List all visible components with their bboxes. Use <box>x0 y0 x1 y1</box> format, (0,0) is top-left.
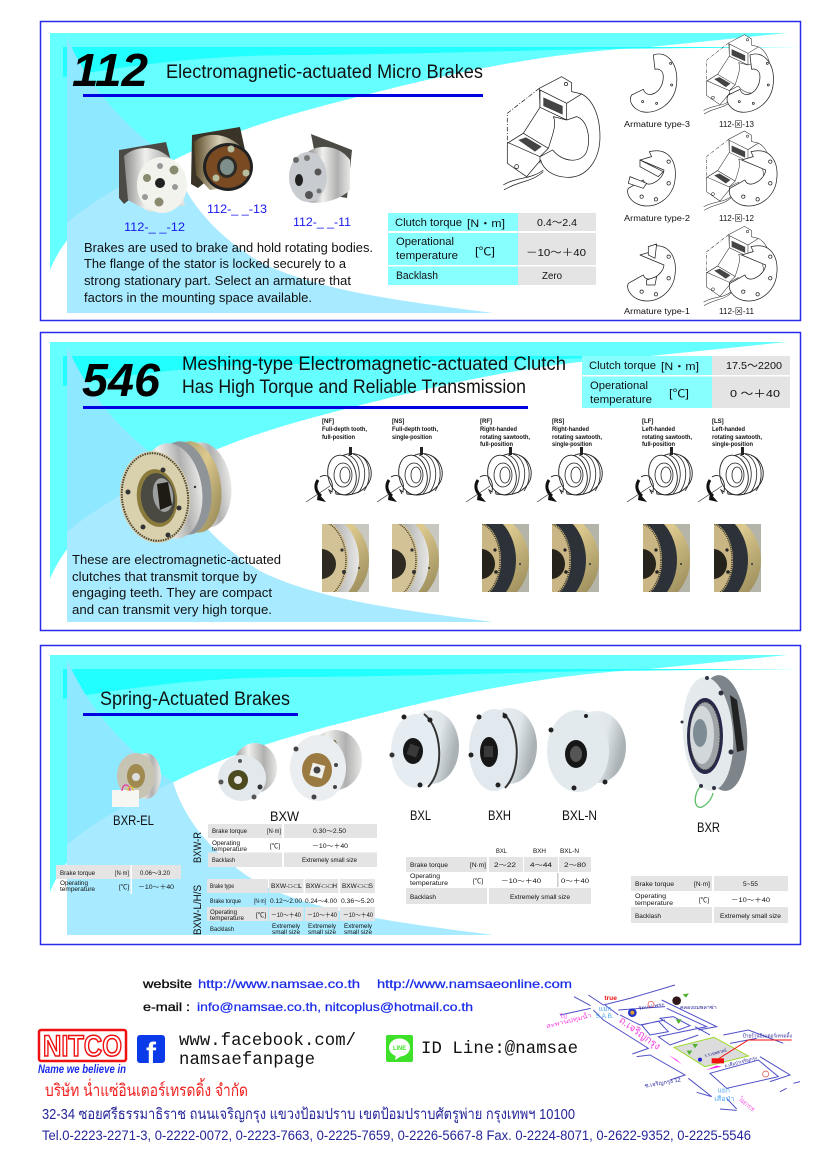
table: BXW-L/H/S specifications: small size <box>272 929 300 936</box>
map: location: ซ.เจริญกรุง 12 <box>644 1076 681 1090</box>
map: location: ไป <box>559 1012 567 1020</box>
text: address: 32-34 ซอยศรีธรรมาธิราช ถนนเจริญกรุง แขวงป้อมปราบ เขตป้อมปราบศัตรูพ่าย กรุงเทพฯ 10100 <box>42 1106 575 1124</box>
table: BXW-R specifications: Operating <box>212 840 240 847</box>
footer: website and email: e-mail : <box>143 1000 190 1014</box>
table: BXL BXH BXL-N specifications: 2～80 <box>564 862 586 869</box>
table: 112 specifications: －10～＋40 <box>526 248 586 259</box>
column: RS <box>495 419 604 610</box>
text: Facebook page <box>179 1032 356 1070</box>
label: 112-11 assembly: 112-⊠-11 <box>719 307 755 316</box>
heading: clutch title <box>83 354 566 409</box>
label: BXW: BXW <box>270 808 300 824</box>
table: BXR specifications: temperature <box>635 900 673 907</box>
table: 112 specifications: [℃] <box>475 246 495 258</box>
photo: BXH <box>468 708 537 791</box>
map: location: แยก <box>599 1006 611 1013</box>
photo: meshing clutch <box>114 438 237 547</box>
column: LF: full-position <box>642 442 675 448</box>
label: armature type-1: Armature type-1 <box>624 307 691 316</box>
photo: 112-11 brake <box>289 134 352 203</box>
table: BXW-R specifications: [℃] <box>270 842 280 850</box>
table: BXW-L/H/S specifications: small size <box>308 929 336 936</box>
column: LF: rotating sawtooth, <box>642 435 692 441</box>
table: BXW-L/H/S specifications: －10～＋40 <box>307 911 337 919</box>
table: BXR-EL specifications: －10～＋40 <box>138 883 174 891</box>
column: NS: Full-depth tooth, <box>392 427 438 433</box>
illustration: assembly 112-11 <box>704 226 777 306</box>
column: NF: full-position <box>322 435 355 441</box>
photo: BXL-N <box>547 710 626 792</box>
photo: 112-12 brake <box>119 142 187 213</box>
column: RS: [RS] <box>552 419 564 425</box>
text: company name: บริษัท น่ำแซ่อินเตอร์เทรดดิ้ง จำกัด <box>45 1078 248 1100</box>
label: BXW-R rotated: BXW-R <box>192 832 204 863</box>
label: BXL-N: BXL-N <box>562 807 597 823</box>
label: BXL: BXL <box>410 807 431 823</box>
column: LS <box>657 419 765 610</box>
map: location: S.A.B. <box>596 1013 614 1020</box>
table: 112 specifications: Operational <box>396 236 454 248</box>
column: RF: [RF] <box>480 419 492 425</box>
panel: 112 micro brakes <box>40 22 800 320</box>
table: BXW-R specifications: Backlash <box>212 857 235 864</box>
table: BXR specifications: Brake torque <box>635 881 674 888</box>
column: RF: rotating sawtooth, <box>480 435 530 441</box>
text block: clutch description: clutches that transmit torque by <box>72 569 257 584</box>
table: BXW-L/H/S specifications: [N·m] <box>254 898 266 905</box>
column: LF: [LF] <box>642 419 653 425</box>
table: BXL BXH BXL-N specifications: 0～＋40 <box>561 877 589 885</box>
table: BXW-L/H/S specifications: BXW-□-□H <box>306 883 337 890</box>
table: BXW-L/H/S specifications: 0.12～2.00 <box>270 898 302 905</box>
table: BXW-R specifications: 0.30～2.50 <box>313 828 346 835</box>
table: 546 specifications: [℃] <box>669 388 689 400</box>
table: BXR specifications: [N·m] <box>694 881 710 888</box>
icon: LINE: LINE <box>393 1045 407 1052</box>
illustration: armature type-2 <box>628 151 675 206</box>
table: BXR specifications: 5~55 <box>743 881 758 888</box>
heading: 546: 546 <box>82 354 160 406</box>
table: BXL BXH BXL-N specifications: Backlash <box>410 894 436 901</box>
table: 546 specifications <box>582 356 790 408</box>
table: BXW-L/H/S specifications: Brake type <box>210 883 234 890</box>
text block: brake description: strong stationary part. Select an armature that <box>84 273 351 288</box>
logo: NITCO <box>38 1030 126 1076</box>
column: LF: Left-handed <box>642 427 675 433</box>
table: BXW-R specifications: Brake torque <box>212 828 247 835</box>
label: BXR: BXR <box>697 819 720 835</box>
map: location: ถ.เสือป่าเจริญกรุง <box>724 1054 758 1070</box>
table: BXW-L/H/S specifications: －10～＋40 <box>271 911 301 919</box>
label: 112-12 assembly: 112-⊠-12 <box>719 214 755 223</box>
illustration: assembly 112-13 <box>704 35 773 114</box>
table: BXW-L/H/S specifications: BXW-□-□L <box>271 883 302 890</box>
map: location: คลองถมพลาซ่า <box>680 1005 717 1011</box>
column: NF: [NF] <box>322 419 334 425</box>
label: 112-12: 112-_ _-12 <box>124 220 185 234</box>
column: NF: Full-depth tooth, <box>322 427 367 433</box>
table: BXR-EL specifications: Operating <box>60 880 88 887</box>
column: LS: single-position <box>712 442 753 448</box>
table: BXR-EL specifications <box>56 865 181 894</box>
table: 546 specifications: temperature <box>590 394 652 406</box>
table: BXW-R specifications: [N·m] <box>267 828 281 835</box>
icon: LINE <box>386 1035 413 1062</box>
text block: clutch description: engaging teeth. They are compact <box>72 585 272 600</box>
map: location: วัดแม่ พระ <box>638 1001 665 1011</box>
label: BXH: BXH <box>488 807 511 823</box>
map: location <box>545 985 800 1113</box>
table: 112 specifications: Clutch torque <box>395 217 462 229</box>
table: BXW-L/H/S specifications: [℃] <box>256 911 266 919</box>
table: BXW-L/H/S specifications: small size <box>344 929 372 936</box>
column: LS: [LS] <box>712 419 724 425</box>
table: BXW-L/H/S specifications: 0.36～5.20 <box>341 898 374 905</box>
photo: BXR <box>679 673 751 807</box>
label: armature type-3: Armature type-3 <box>624 120 691 129</box>
table: 112 specifications <box>388 213 596 285</box>
footer: website and email: website <box>142 977 192 991</box>
text block: brake description: Brakes are used to brake and hold rotating bodies. <box>84 240 373 255</box>
illustration: assembly 112-12 <box>704 131 777 210</box>
table: BXR-EL specifications: 0.06～3.20 <box>140 870 170 877</box>
text block: clutch description <box>72 552 281 617</box>
footer: website and email <box>142 977 572 1014</box>
table: BXW-R specifications: －10～＋40 <box>312 842 348 850</box>
text block: clutch description: and can transmit very high torque. <box>72 602 272 617</box>
map: location: ถ.เจริญกรุง <box>617 1015 662 1053</box>
label: BXR-EL: BXR-EL <box>113 812 154 828</box>
table: 546 specifications: Operational <box>590 380 648 392</box>
map: location: สะพานปทุมน้ำ <box>545 1009 592 1030</box>
table: 112 specifications: Zero <box>542 270 562 282</box>
table: BXL BXH BXL-N specifications: Operating <box>410 873 440 880</box>
footer: website and email: http://www.namsae.co.th <box>198 977 360 991</box>
column: RF: Right-handed <box>480 427 517 433</box>
text block: brake description: The flange of the stator is locked securely to a <box>84 256 347 271</box>
map: location: เสือป่า <box>714 1095 735 1103</box>
footer: website and email: http://www.namsaeonline.com <box>377 977 572 991</box>
icon: Facebook: f <box>146 1037 157 1070</box>
map: location: ไปเยาวราช <box>737 1095 756 1113</box>
column: LF <box>586 419 694 610</box>
text: Facebook page: www.facebook.com/ <box>179 1032 356 1051</box>
column: NS: [NS] <box>392 419 404 425</box>
table: 112 specifications: 0.4～2.4 <box>537 218 577 229</box>
text: telephone and fax: Tel.0-2223-2271-3, 0-2222-0072, 0-2223-7663, 0-2225-7659, 0-2226-5667-8 Fax. 0-2224-8071, 0-2622-9352, 0-2225-5546 <box>42 1128 751 1143</box>
table: BXR-EL specifications: temperature <box>60 886 95 893</box>
column: RS: rotating sawtooth, <box>552 435 602 441</box>
photo: 112-13 brake <box>191 127 253 191</box>
text: Facebook page: namsaefanpage <box>179 1051 315 1070</box>
label: 112-13: 112-_ _-13 <box>207 202 267 216</box>
logo: NITCO: NITCO <box>43 1030 122 1063</box>
table: BXR specifications: Operating <box>635 893 666 900</box>
map: location: true <box>604 995 617 1002</box>
text block: brake description <box>84 240 373 305</box>
illustration: armature type-1 <box>628 244 675 301</box>
table: 546 specifications: Clutch torque <box>589 360 656 372</box>
table: BXL BXH BXL-N specifications: BXL <box>496 848 507 855</box>
label: BXW-L/H/S rotated: BXW-L/H/S <box>192 885 204 935</box>
table: BXW-L/H/S specifications: Extremely <box>272 923 301 930</box>
table: BXW-L/H/S specifications: BXW-□-□S <box>342 883 374 890</box>
illustration: brake stator line art <box>503 77 600 190</box>
table: BXW-L/H/S specifications: 0.24～4.00 <box>305 898 337 905</box>
heading: clutch title: Meshing-type Electromagnetic-actuated Clutch <box>182 354 566 375</box>
table: BXL BXH BXL-N specifications: 2～22 <box>494 862 516 869</box>
table: BXR specifications: [℃] <box>699 896 709 904</box>
table: BXW-R specifications: temperature <box>212 846 247 853</box>
table: BXR specifications: Backlash <box>635 913 661 920</box>
map: location: ป้ายร้านอินเตอร์เทรดดิ้ง <box>743 1032 792 1040</box>
panel: spring-actuated brakes <box>40 646 800 944</box>
table: BXL BXH BXL-N specifications: temperature <box>410 880 448 887</box>
table: BXL BXH BXL-N specifications: [℃] <box>473 877 483 885</box>
map: location: แยก <box>718 1088 730 1095</box>
table: BXW-L/H/S specifications: temperature <box>210 915 244 922</box>
table: BXW-L/H/S specifications <box>207 879 375 936</box>
table: BXR-EL specifications: [℃] <box>119 883 129 891</box>
illustration: armature type-3 <box>630 54 677 112</box>
table: 112 specifications: Backlash <box>396 270 438 282</box>
table: 546 specifications: 17.5～2200 <box>726 360 782 372</box>
photo: BXW large <box>290 730 362 801</box>
table: BXW-R specifications: Extremely small size <box>302 857 357 864</box>
panel: 546 clutch <box>40 332 800 630</box>
heading: clutch title: Has High Torque and Reliable Transmission <box>182 377 526 398</box>
table: BXW-L/H/S specifications: Extremely <box>308 923 337 930</box>
table: 546 specifications: [N・m] <box>661 361 699 373</box>
photo: BXR-EL with card <box>112 753 161 807</box>
photo: BXL <box>390 710 459 788</box>
table: 112 specifications: [N・m] <box>467 218 505 230</box>
table: BXL BXH BXL-N specifications: 4～44 <box>530 862 552 869</box>
table: BXL BXH BXL-N specifications <box>406 848 591 904</box>
column: RF <box>425 419 533 610</box>
table: BXR-EL specifications: Brake torque <box>60 870 95 877</box>
table: BXL BXH BXL-N specifications: BXH <box>533 848 546 855</box>
map: location: ร.ร.เทพศาสน์ <box>704 1046 728 1058</box>
column: NS: single-position <box>392 435 432 441</box>
icon: Facebook <box>137 1035 165 1070</box>
table: BXW-L/H/S specifications: Backlash <box>210 926 234 933</box>
column: LS: Left-handed <box>712 427 745 433</box>
table: BXL BXH BXL-N specifications: BXL-N <box>560 848 579 855</box>
text: LINE ID: ID Line:@namsae <box>421 1040 578 1059</box>
label: armature type-2: Armature type-2 <box>624 214 691 223</box>
table: 112 specifications: temperature <box>396 250 458 262</box>
table: 546 specifications: 0 ～＋40 <box>730 388 780 400</box>
photo: BXW small <box>218 743 277 801</box>
heading: micro brakes title <box>83 62 483 97</box>
column: LS: rotating sawtooth, <box>712 435 762 441</box>
label: 112-13 assembly: 112-⊠-13 <box>719 120 755 129</box>
table: BXW-L/H/S specifications: －10～＋40 <box>343 911 373 919</box>
table: BXR-EL specifications: [N·m] <box>115 870 129 877</box>
table: BXW-L/H/S specifications: Brake torque <box>210 898 241 905</box>
heading: spring-actuated brakes: Spring-Actuated Brakes <box>100 689 290 710</box>
column: RF: full-position <box>480 442 513 448</box>
footer: website and email: info@namsae.co.th, nitcoplus@hotmail.co.th <box>197 1000 473 1014</box>
text block: clutch description: These are electromagnetic-actuated <box>72 552 281 567</box>
label: 112-11: 112-_ _-11 <box>293 215 351 229</box>
table: BXW-L/H/S specifications: Extremely <box>344 923 373 930</box>
table: BXL BXH BXL-N specifications: [N·m] <box>470 862 486 869</box>
table: BXR specifications: －10～＋40 <box>731 896 770 904</box>
text block: brake description: factors in the mounting space available. <box>84 290 312 305</box>
logo: NITCO: Name we believe in <box>38 1064 126 1076</box>
table: BXL BXH BXL-N specifications: －10～＋40 <box>501 877 541 885</box>
column: RS: single-position <box>552 442 592 448</box>
table: BXR specifications <box>631 876 788 923</box>
table: BXW-L/H/S specifications: Operating <box>210 909 237 916</box>
heading: micro brakes title: Electromagnetic-actuated Micro Brakes <box>166 62 483 83</box>
column: NF <box>265 419 373 610</box>
table: BXL BXH BXL-N specifications: Brake torque <box>410 862 448 869</box>
table: BXR specifications: Extremely small size <box>720 913 781 920</box>
column: RS: Right-handed <box>552 427 589 433</box>
table: BXW-R specifications <box>208 824 377 867</box>
table: BXL BXH BXL-N specifications: Extremely small size <box>510 894 570 901</box>
column: NS <box>335 419 444 610</box>
heading: 112: 112 <box>72 44 148 96</box>
